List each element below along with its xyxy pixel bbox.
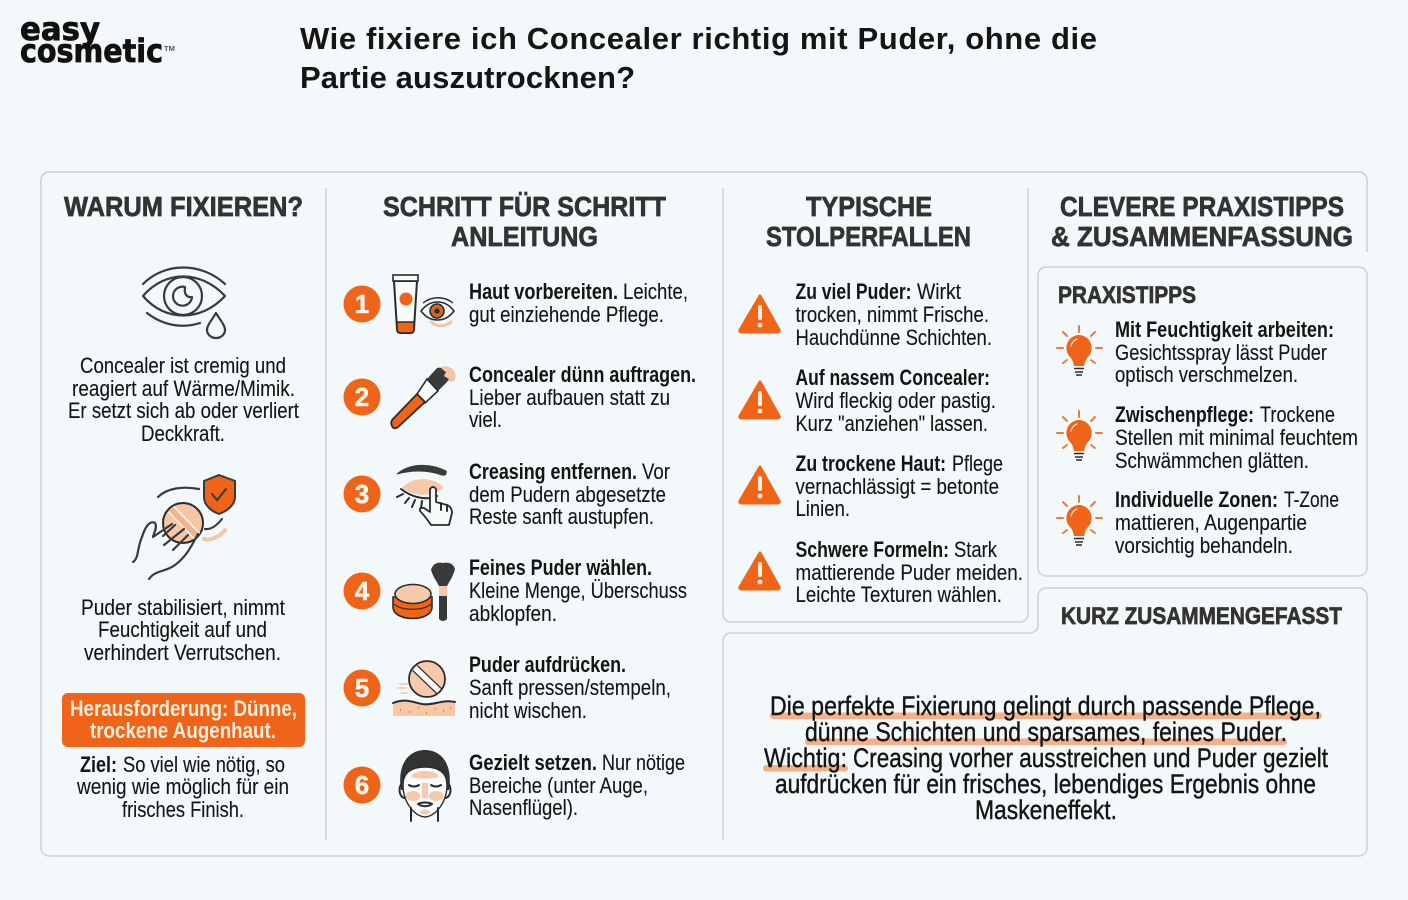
- text: step 4: Feines Puder wählen.: [469, 555, 652, 580]
- tip 2: [1057, 402, 1358, 473]
- text: step 6: Gezielt setzen.: [469, 750, 597, 775]
- text: step 6: Nasenflügel).: [469, 795, 578, 820]
- text: pitfall 4: mattierende Puder meiden.: [796, 560, 1023, 585]
- step 1: 1: [355, 289, 369, 319]
- text: tip 2: [1115, 402, 1358, 473]
- text: pitfall 4: Schwere Formeln:: [796, 537, 949, 562]
- text: step 1: Haut vorbereiten.: [469, 279, 618, 304]
- text: step 2: viel.: [469, 407, 502, 432]
- text: summary: aufdrücken für ein frisches, lebendiges Ergebnis ohne: [775, 769, 1316, 799]
- icon: warning triangle: [740, 382, 779, 418]
- text: concealer: Concealer ist cremig und: [80, 353, 286, 378]
- subheading: praxistipps: PRAXISTIPPS: [1058, 282, 1196, 309]
- text: tip 1: Mit Feuchtigkeit arbeiten:: [1115, 317, 1334, 342]
- icon: tube and eye: [393, 275, 454, 333]
- text: step 6: Bereiche (unter Auge,: [469, 773, 648, 798]
- icon: light bulb: [1057, 411, 1102, 460]
- text: summary: Die perfekte Fixierung gelingt durch passende Pflege,: [770, 691, 1321, 721]
- panel: clevere praxistipps: [1051, 191, 1358, 558]
- heading: praxistipps und zusammenfassung: & ZUSAMMENFASSUNG: [1051, 221, 1353, 252]
- step 6: 6: [355, 770, 369, 800]
- step 1: [344, 275, 688, 333]
- step 6: [344, 750, 685, 821]
- heading: warum fixieren: WARUM FIXIEREN?: [64, 191, 303, 222]
- icon: light bulb: [1057, 326, 1102, 375]
- text: step 2: [469, 362, 696, 432]
- text: summary: Creasing vorher ausstreichen und Puder gezielt: [853, 743, 1328, 773]
- text: pitfall 4: Stark: [954, 537, 998, 562]
- step 4: 4: [355, 576, 370, 606]
- text: tip 3: [1115, 487, 1339, 558]
- text: pitfall 2: [796, 365, 996, 436]
- text: pitfall 1: Wirkt: [917, 279, 961, 304]
- text: concealer: Deckkraft.: [141, 421, 225, 446]
- icon: face zones: [400, 750, 450, 821]
- text: pitfall 2: Auf nassem Concealer:: [796, 365, 990, 390]
- text: tip 1: Gesichtsspray lässt Puder: [1115, 340, 1327, 365]
- logo: TM: [164, 46, 175, 53]
- heading: schritt fuer schritt: SCHRITT FÜR SCHRITT: [383, 191, 666, 222]
- title: [300, 21, 1097, 95]
- text: pitfall 1: trocken, nimmt Frische.: [796, 302, 989, 327]
- text: step 6: [469, 750, 685, 820]
- logo: cosmetic: [20, 32, 163, 70]
- text: step 5: Sanft pressen/stempeln,: [469, 675, 671, 700]
- heading: praxistipps und zusammenfassung: [1051, 191, 1353, 252]
- text: tip 3: Individuelle Zonen:: [1115, 487, 1278, 512]
- heading: stolperfallen: STOLPERFALLEN: [766, 221, 971, 252]
- panel: kurz zusammengefasst: [763, 603, 1342, 825]
- text: pitfall 1: Zu viel Puder:: [796, 279, 912, 304]
- text: tip 2: Stellen mit minimal feuchtem: [1115, 425, 1358, 450]
- step 2: [344, 362, 696, 432]
- icon: puff pressing on skin: [393, 661, 455, 716]
- step 2: 2: [355, 382, 369, 412]
- icon: makeup brush: [391, 366, 456, 428]
- icon: hand with powder puff and shield: [133, 475, 235, 579]
- text: summary: dünne Schichten und sparsames, feines Puder.: [805, 717, 1287, 747]
- pitfall 4: [740, 537, 1023, 607]
- text: step 3: Reste sanft austupfen.: [469, 504, 654, 529]
- text: ziel: Ziel:: [80, 752, 117, 777]
- text: step 5: Puder aufdrücken.: [469, 652, 626, 677]
- text: step 3: Creasing entfernen.: [469, 459, 637, 484]
- step 5: [344, 652, 671, 723]
- heading: kurz zusammengefasst: KURZ ZUSAMMENGEFASST: [1061, 603, 1342, 630]
- pitfall 3: [740, 451, 1003, 521]
- text: pitfall 4: [796, 537, 1023, 607]
- text: step 3: [469, 459, 670, 529]
- text: pitfall 1: Hauchdünne Schichten.: [796, 325, 992, 350]
- highlight underlines: [763, 712, 1322, 772]
- text: step 1: gut einziehende Pflege.: [469, 302, 664, 327]
- text: pitfall 3: [796, 451, 1003, 521]
- icon: eye with finger: [397, 465, 452, 525]
- title: Partie auszutrocknen?: [300, 60, 635, 95]
- text: step 6: Nur nötige: [602, 750, 685, 775]
- icon: warning triangle: [740, 296, 779, 332]
- text: tip 2: Schwämmchen glätten.: [1115, 448, 1309, 473]
- heading: schritt fuer schritt: ANLEITUNG: [451, 221, 598, 252]
- text: puder stabilisiert: verhindert Verrutschen.: [84, 640, 281, 665]
- text: step 1: [469, 279, 688, 327]
- icon: warning triangle: [740, 467, 779, 503]
- text: puder stabilisiert: Puder stabilisiert, nimmt: [81, 595, 285, 620]
- text: summary: Maskeneffekt.: [975, 795, 1117, 825]
- text: ziel: wenig wie möglich für ein: [76, 774, 289, 799]
- text: pitfall 3: vernachlässigt = betonte: [796, 474, 999, 499]
- text: tip 1: [1115, 317, 1334, 387]
- callout: herausforderung: trockene Augenhaut.: [90, 718, 276, 743]
- pitfall 2: [740, 365, 996, 436]
- tip 3: [1057, 487, 1339, 558]
- step 3: [344, 459, 670, 529]
- text: concealer: Er setzt sich ab oder verliert: [68, 398, 299, 423]
- icon: light bulb: [1057, 496, 1102, 545]
- text: tip 3: T-Zone: [1284, 487, 1339, 512]
- tip 1: [1057, 317, 1334, 387]
- text: step 5: [469, 652, 671, 723]
- text: tip 3: vorsichtig behandeln.: [1115, 533, 1293, 558]
- text: step 3: dem Pudern abgesetzte: [469, 482, 666, 507]
- callout: herausforderung: [62, 693, 305, 747]
- text: puder stabilisiert: [81, 595, 285, 665]
- text: pitfall 2: Kurz "anziehen" lassen.: [796, 411, 988, 436]
- text: tip 1: optisch verschmelzen.: [1115, 362, 1298, 387]
- text: step 2: Concealer dünn auftragen.: [469, 362, 696, 387]
- text: concealer: reagiert auf Wärme/Mimik.: [72, 376, 295, 401]
- panel frame: outer card with column and box outlines: [41, 172, 1367, 856]
- text: pitfall 3: Zu trockene Haut:: [796, 451, 946, 476]
- text: step 1: Leichte,: [623, 279, 688, 304]
- text: pitfall 2: Wird fleckig oder pastig.: [796, 388, 996, 413]
- text: tip 2: Trockene: [1260, 402, 1335, 427]
- text: summary: Wichtig:: [764, 743, 847, 773]
- heading: stolperfallen: TYPISCHE: [806, 191, 932, 222]
- logo: easy: [20, 10, 100, 48]
- icon: warning triangle: [740, 553, 779, 589]
- text: pitfall 3: Linien.: [796, 496, 850, 521]
- text: step 4: abklopfen.: [469, 601, 557, 626]
- heading: stolperfallen: [766, 191, 971, 252]
- text: step 4: [469, 555, 687, 626]
- step 3: 3: [355, 479, 369, 509]
- callout: herausforderung: Herausforderung: Dünne,: [70, 696, 297, 721]
- text: step 5: nicht wischen.: [469, 698, 587, 723]
- icon: eye with tear drop: [143, 268, 225, 338]
- heading: praxistipps und zusammenfassung: CLEVERE PRAXISTIPPS: [1060, 191, 1344, 222]
- text: pitfall 3: Pflege: [952, 451, 1003, 476]
- text: puder stabilisiert: Feuchtigkeit auf und: [98, 617, 267, 642]
- panel: warum fixieren: [62, 191, 305, 822]
- text: ziel: So viel wie nötig, so: [123, 752, 285, 777]
- heading: schritt fuer schritt: [383, 191, 666, 252]
- step 5: 5: [355, 673, 369, 703]
- text: step 3: Vor: [642, 459, 670, 484]
- text: tip 2: Zwischenpflege:: [1115, 402, 1254, 427]
- text: ziel: frisches Finish.: [122, 797, 244, 822]
- text: pitfall 4: Leichte Texturen wählen.: [796, 582, 1002, 607]
- panel: schritt fuer schritt: [344, 191, 696, 821]
- text: concealer: [68, 353, 299, 446]
- text: step 4: Kleine Menge, Überschuss: [469, 578, 687, 603]
- text: ziel: [76, 752, 289, 822]
- text: pitfall 1: [796, 279, 992, 350]
- text: step 2: Lieber aufbauen statt zu: [469, 385, 670, 410]
- icon: powder jar and brush: [393, 563, 455, 621]
- step 4: [344, 555, 687, 626]
- text: tip 3: mattieren, Augenpartie: [1115, 510, 1307, 535]
- logo: [20, 10, 175, 70]
- title: Wie fixiere ich Concealer richtig mit Puder, ohne die: [300, 21, 1097, 56]
- panel: typische stolperfallen: [740, 191, 1023, 607]
- text: summary: [764, 691, 1328, 825]
- pitfall 1: [740, 279, 992, 350]
